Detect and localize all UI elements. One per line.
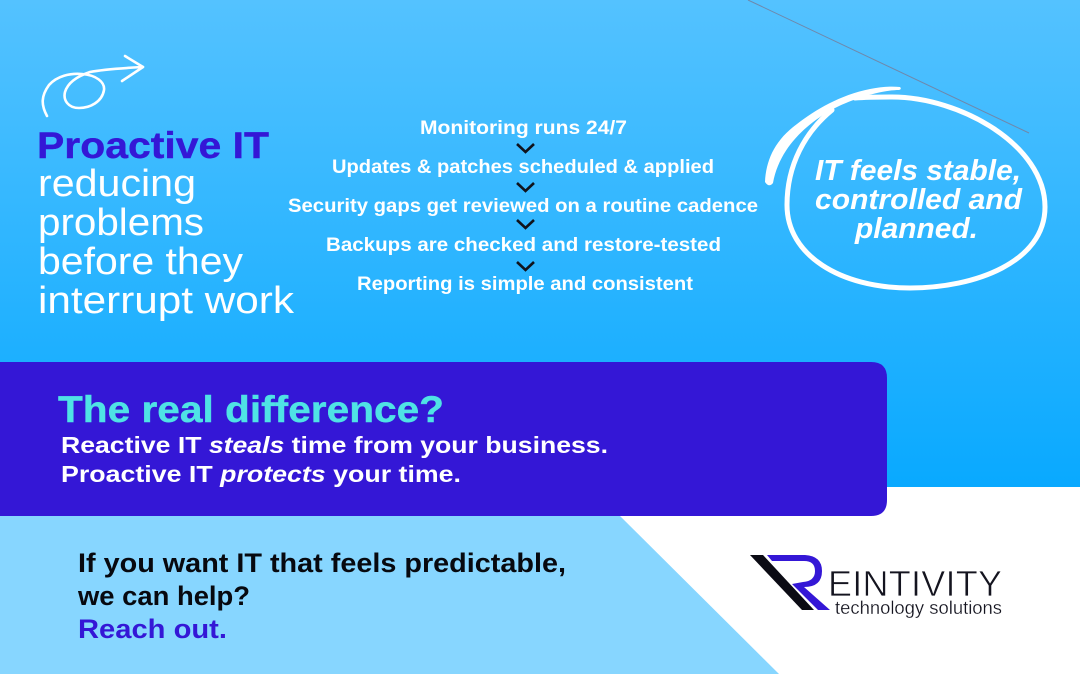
heading highlight: Proactive IT	[37, 125, 269, 166]
step 2: Updates & patches scheduled & applied	[332, 157, 714, 178]
call to action text: we can help?	[77, 581, 250, 611]
arrow: chevron 2	[517, 183, 534, 191]
heading body text: before they	[38, 241, 243, 283]
callout text: IT feels stable,	[815, 155, 1021, 187]
process list: proactive steps	[288, 118, 758, 295]
logo tagline: technology solutions	[835, 598, 1002, 618]
panel heading: The real difference?	[58, 389, 444, 430]
step 3: Security gaps get reviewed on a routine cadence	[288, 196, 758, 217]
logo: Reintivity technology solutions	[750, 555, 1002, 618]
step 4: Backups are checked and restore-tested	[326, 235, 721, 256]
heading body text	[38, 163, 295, 322]
call to action text	[77, 548, 566, 644]
call to action text: If you want IT that feels predictable,	[78, 548, 566, 578]
panel: the real difference	[0, 362, 887, 516]
step 1: Monitoring runs 24/7	[420, 118, 627, 139]
heading body text: problems	[38, 202, 204, 244]
callout text	[815, 155, 1023, 245]
background panel: light blue footer wedge	[0, 516, 779, 674]
logo mark: black stripe	[750, 555, 814, 610]
arrow: chevron 4	[517, 262, 534, 270]
callout: circled statement	[765, 87, 1045, 288]
panel background	[0, 362, 887, 516]
logo mark: purple R	[767, 555, 830, 610]
callout text: controlled and	[815, 184, 1023, 216]
call to action text: Reach out.	[78, 614, 227, 644]
callout text: planned.	[854, 213, 978, 245]
panel line: reactive: Reactive IT steals time from your business.	[61, 432, 608, 458]
logo wordmark: EINTIVITY	[828, 563, 1002, 604]
hand-drawn circle	[765, 87, 1045, 288]
diagonal hairline	[748, 0, 1029, 133]
background panel: blue gradient	[0, 0, 1080, 487]
heading body text: interrupt work	[38, 280, 295, 322]
step 5: Reporting is simple and consistent	[357, 274, 694, 295]
heading body text: reducing	[38, 163, 196, 205]
icon: hand-drawn looping arrow	[43, 56, 143, 116]
panel line: proactive: Proactive IT protects your time.	[61, 461, 461, 487]
arrow: chevron 1	[517, 144, 534, 152]
heading: Proactive IT reducing problems before they interrupt work	[37, 125, 295, 322]
arrow: chevron 3	[517, 220, 534, 228]
